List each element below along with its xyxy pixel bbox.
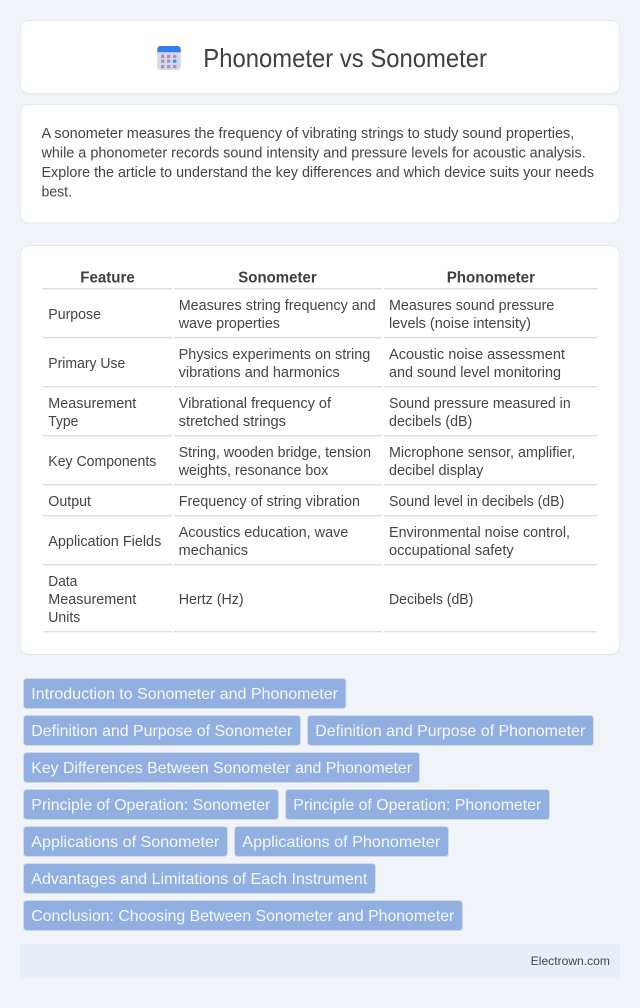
tag: applications phonometer	[234, 826, 448, 856]
tag: conclusion: Conclusion: Choosing Between Sonometer and Phonometer	[31, 908, 455, 925]
table row: data measurement units: Decibels (dB)	[389, 592, 473, 608]
tag: applications sonometer: Applications of Sonometer	[31, 834, 220, 851]
table row: application fields: Environmental noise control,	[389, 525, 570, 541]
text block: summary	[40, 126, 594, 200]
table row: key components: weights, resonance box	[178, 463, 329, 479]
table header row: Sonometer	[238, 270, 317, 287]
tag: key differences: Key Differences Between Sonometer and Phonometer	[31, 760, 413, 777]
table row: key components: decibel display	[389, 463, 484, 479]
table row: primary use: Physics experiments on string	[179, 347, 370, 363]
tag: definition phonometer: Definition and Purpose of Phonometer	[315, 723, 586, 740]
table row: purpose: Measures string frequency and	[179, 298, 376, 314]
table row: data measurement units: Measurement	[48, 592, 136, 608]
tag: advantages and limitations: Advantages and Limitations of Each Instrument	[31, 871, 368, 888]
table row: output: Frequency of string vibration	[179, 494, 360, 510]
tag: key differences	[24, 752, 420, 782]
table row: purpose: wave properties	[178, 316, 280, 332]
table row: output: Output	[48, 494, 91, 510]
table row: measurement type: stretched strings	[179, 414, 286, 430]
panel: header	[20, 20, 620, 94]
tag: definition phonometer	[308, 716, 594, 746]
text block: summary: best.	[42, 184, 72, 200]
table row: measurement type: Vibrational frequency of	[179, 396, 332, 412]
tag: principle phonometer	[286, 790, 550, 820]
table row: purpose: levels (noise intensity)	[389, 316, 531, 332]
table row: measurement type: decibels (dB)	[389, 414, 472, 430]
table row: application fields: Acoustics education, wave	[179, 525, 348, 541]
table row: primary use: vibrations and harmonics	[179, 365, 340, 381]
table row: primary use	[43, 347, 597, 387]
table row: application fields: Application Fields	[48, 534, 161, 550]
table row: output: Sound level in decibels (dB)	[389, 494, 564, 510]
text block: summary: Explore the article to understand the key differences and which device suits your needs	[42, 165, 594, 181]
tag: introduction	[24, 678, 346, 708]
text block: summary: A sonometer measures the frequency of vibrating strings to study sound properties,	[42, 126, 574, 142]
table row: key components: Key Components	[48, 454, 156, 470]
tag: applications phonometer: Applications of Phonometer	[242, 834, 441, 851]
tag: advantages and limitations	[24, 864, 376, 894]
footer	[20, 944, 620, 978]
panel: introduction	[20, 104, 620, 223]
icon: calendar grid	[157, 46, 181, 70]
tag: applications sonometer	[24, 826, 228, 856]
table row: key components	[43, 445, 597, 485]
panel: comparison table	[20, 246, 620, 654]
panel: topic tags	[24, 678, 594, 930]
tag: principle sonometer	[24, 790, 278, 820]
table row: measurement type: Sound pressure measured in	[389, 396, 571, 412]
table row: application fields: mechanics	[179, 543, 248, 559]
table row: key components: Microphone sensor, amplifier,	[389, 445, 575, 461]
table row: measurement type	[43, 396, 597, 436]
text block: summary: while a phonometer records sound intensity and pressure levels for acoustic analysis.	[40, 146, 586, 162]
table row: data measurement units: Data	[48, 574, 77, 590]
table row: application fields	[43, 525, 597, 565]
tag: introduction: Introduction to Sonometer and Phonometer	[31, 686, 339, 703]
table row: purpose: Measures sound pressure	[389, 298, 554, 314]
table row: primary use: Acoustic noise assessment	[389, 347, 565, 363]
table row: data measurement units	[43, 574, 597, 632]
table row: application fields: occupational safety	[389, 543, 515, 559]
footer credit: Electrown.com	[531, 954, 610, 968]
table header row	[43, 270, 597, 289]
table row: primary use: Primary Use	[48, 356, 125, 372]
table row: primary use: and sound level monitoring	[389, 365, 561, 381]
tag: definition sonometer: Definition and Purpose of Sonometer	[31, 723, 293, 740]
table row: purpose	[43, 298, 597, 338]
table row: data measurement units: Units	[48, 610, 80, 626]
table row: measurement type: Measurement	[48, 396, 136, 412]
table header row: Feature	[80, 270, 135, 287]
tag: principle sonometer: Principle of Operation: Sonometer	[31, 797, 271, 814]
table row: data measurement units: Hertz (Hz)	[179, 592, 244, 608]
table row: output	[43, 494, 597, 516]
table row: key components: String, wooden bridge, tension	[179, 445, 371, 461]
tag: principle phonometer: Principle of Operation: Phonometer	[293, 797, 542, 814]
table row: purpose: Purpose	[48, 307, 101, 323]
table header row: Phonometer	[447, 270, 535, 287]
tag: conclusion	[24, 900, 462, 930]
table row: measurement type: Type	[48, 414, 78, 430]
tag: definition sonometer	[24, 716, 300, 746]
title: Phonometer vs Sonometer	[203, 45, 487, 73]
